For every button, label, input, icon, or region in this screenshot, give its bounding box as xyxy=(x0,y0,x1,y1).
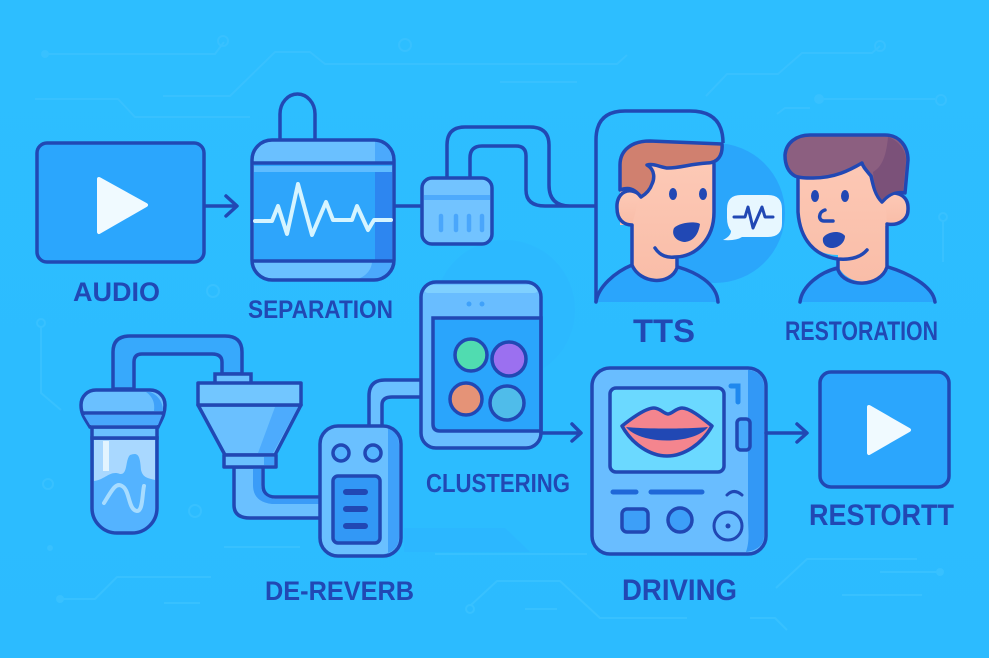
clustering panel xyxy=(421,282,541,448)
ear xyxy=(617,191,640,225)
cluster dot: purple xyxy=(492,342,526,376)
restoration speaker xyxy=(785,135,935,302)
arrow: clustering to driving xyxy=(541,424,581,441)
label: clustering: CLUSTERING xyxy=(426,468,570,498)
mouth line xyxy=(626,427,708,440)
speech bubble with wave xyxy=(723,195,782,240)
cables to TTS xyxy=(447,127,596,206)
TTS speaker xyxy=(596,111,785,302)
arrow: audio to separation xyxy=(205,196,237,216)
separation device xyxy=(252,94,394,280)
label: audio: AUDIO xyxy=(73,277,160,307)
tablet body xyxy=(421,282,541,448)
inner screen xyxy=(433,318,541,431)
hair xyxy=(785,135,908,202)
bottle waveform xyxy=(104,485,144,511)
pipe to clustering xyxy=(369,380,422,427)
status lines xyxy=(613,490,702,494)
lower pipe xyxy=(234,467,322,518)
module box xyxy=(422,178,492,244)
driving device xyxy=(592,368,766,554)
output video panel xyxy=(820,372,949,487)
water filter bottle xyxy=(81,336,242,533)
screen xyxy=(610,388,724,472)
neck and face xyxy=(620,160,714,280)
knobs xyxy=(333,445,349,461)
square button xyxy=(622,509,648,532)
waveform xyxy=(255,184,391,235)
hair xyxy=(620,141,722,197)
indicator xyxy=(731,386,738,402)
arrow: driving to output xyxy=(766,424,807,442)
funnel collar xyxy=(224,455,276,467)
bottle neck xyxy=(92,427,157,438)
label: de-reverb: DE-REVERB xyxy=(265,576,414,606)
funnel top xyxy=(198,383,301,405)
hair shadow xyxy=(873,137,906,200)
bottle cap xyxy=(81,390,165,427)
mouth xyxy=(673,222,700,242)
cluster dot: teal xyxy=(490,386,524,420)
device panel xyxy=(333,476,380,543)
ear xyxy=(885,193,908,224)
frame outline xyxy=(596,111,723,302)
funnel connector xyxy=(215,374,251,384)
device body xyxy=(252,140,394,280)
speech glow xyxy=(645,143,785,283)
audio input node xyxy=(37,143,204,262)
cluster dot: green xyxy=(455,339,487,371)
shirt xyxy=(800,265,935,302)
nose xyxy=(820,210,833,221)
eyes xyxy=(811,190,819,202)
lips xyxy=(622,408,712,456)
mouth xyxy=(823,232,845,248)
top pipes xyxy=(113,336,242,389)
icon: audio play button xyxy=(99,179,146,232)
device handle xyxy=(280,94,315,140)
dial xyxy=(714,512,742,540)
de-reverb device xyxy=(320,380,422,556)
device body xyxy=(320,426,401,556)
audio video panel xyxy=(37,143,204,262)
label: restortt: RESTORTT xyxy=(809,499,954,532)
label: TTS: TTS xyxy=(633,313,695,349)
icon: output play button xyxy=(869,407,909,453)
funnel unit xyxy=(198,374,322,518)
round button xyxy=(668,508,692,532)
label: driving: DRIVING xyxy=(622,574,737,607)
label: separation: SEPARATION xyxy=(248,296,393,324)
slot xyxy=(737,419,750,450)
eyes xyxy=(669,188,677,200)
funnel cone xyxy=(198,405,301,455)
output node xyxy=(820,372,949,487)
link to separation xyxy=(394,204,422,208)
device body xyxy=(592,368,766,554)
label: restoration: RESTORATION xyxy=(785,316,938,346)
connector module and cables xyxy=(394,127,596,244)
bottle body xyxy=(92,438,157,533)
cluster dot: orange xyxy=(450,383,482,415)
shirt xyxy=(596,262,718,302)
neck and face xyxy=(798,150,905,282)
